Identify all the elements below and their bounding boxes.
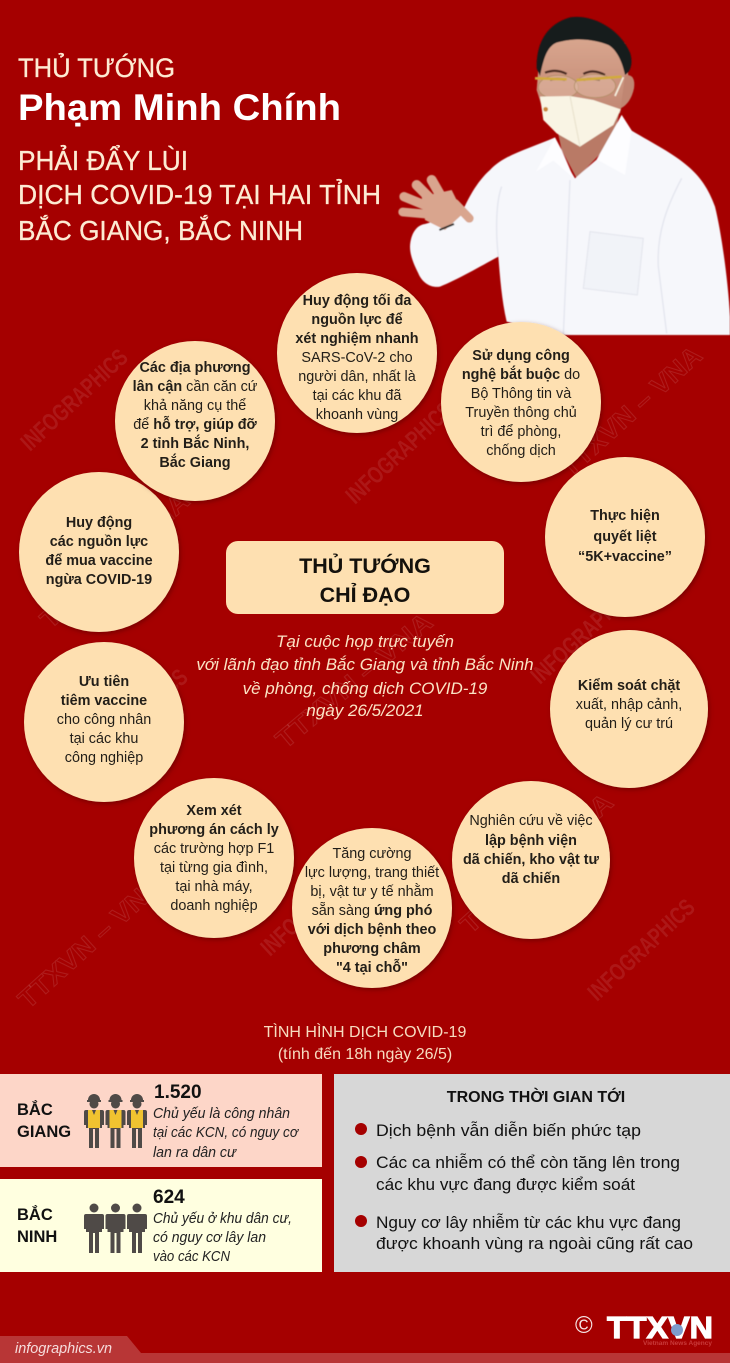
circle: mandatory technology: trì để phòng, [481,424,561,440]
watermarks: TTXVN – VNA [270,606,438,755]
panel: Bắc Giang: lan ra dân cư [153,1145,238,1161]
watermarks: INFOGRAPHICS [526,577,644,689]
watermarks: TTXVN – VNA [454,787,619,939]
watermarks: TTXVN – VNA [554,340,708,482]
situation heading: TÌNH HÌNH DỊCH COVID-19 [264,1022,466,1041]
circle: rapid testing: Huy động tối đa [303,293,412,309]
watermarks: INFOGRAPHICS [341,397,459,509]
situation heading [264,1022,466,1063]
shirt [410,115,730,335]
circle: mandatory technology: Sử dụng công [472,348,570,364]
bullet list: Dịch bệnh vẫn diễn biến phức tạp [376,1121,641,1140]
logo: TTXVN: TTXVN [607,1310,713,1345]
circle: border control: Kiểm soát chặt [578,678,680,694]
circle: vaccination priority: cho công nhân [57,712,151,728]
circle: four on-the-spot: phương châm [323,941,421,957]
circle: rapid testing: tại các khu đã [313,388,401,404]
circle: vaccination priority: tiêm vaccine [61,693,147,709]
circle: vaccine funding: để mua vaccine [45,553,153,569]
panel: Bắc Ninh: NINH [17,1228,57,1246]
watermarks: TTXVN – VNA [34,485,195,634]
logo: TTXVN: Vietnam News Agency [643,1341,713,1347]
circle: vaccine funding: Huy động [66,515,132,531]
bullet list: các khu vực đang được kiểm soát [376,1176,635,1194]
title block [18,51,381,246]
shirt collar [536,115,632,178]
title block: PHẢI ĐẨY LÙI [18,144,188,176]
circle: 5K plus vaccine [545,457,705,617]
panel: Bắc Ninh: vào các KCN [153,1249,230,1265]
meeting description: với lãnh đạo tỉnh Bắc Giang và tỉnh Bắc Ninh [196,655,534,674]
panel: Bắc Giang: 1.520 [154,1082,202,1103]
circle: mandatory technology: chống dịch [486,443,556,459]
circle: F1 isolation: các trường hợp F1 [154,841,274,857]
circle: field hospitals: dã chiến, kho vật tư [463,852,600,868]
bullet list: Nguy cơ lây nhiễm từ các khu vực đang [376,1213,681,1232]
panel: Bắc Giang: GIANG [17,1123,71,1141]
circle: four on-the-spot: lực lượng, trang thiết [305,865,439,881]
panel: outlook [334,1074,730,1272]
panel: Bắc Ninh: có nguy cơ lây lan [153,1230,266,1246]
central heading box [226,541,504,614]
meeting description: về phòng, chống dịch COVID-19 [243,679,488,698]
icon: three workers in vests [84,1094,147,1148]
panel: Bắc Ninh [0,1179,322,1272]
circle: neighbouring provinces: Bắc Giang [159,453,231,471]
circle: vaccine funding: ngừa COVID-19 [46,572,152,588]
panel: Bắc Giang: BẮC [17,1100,53,1119]
circle: F1 isolation: tại từng gia đình, [160,860,268,876]
circle: F1 isolation: Xem xét [186,803,242,819]
circle: mandatory technology: Truyền thông chủ [465,405,577,421]
circle: neighbouring provinces [115,341,275,501]
situation heading: (tính đến 18h ngày 26/5) [278,1046,452,1063]
circle: neighbouring provinces: để hỗ trợ, giúp đỡ [133,416,258,433]
watermarks: TTXVN – VNA [12,868,170,1014]
central heading box: CHỈ ĐẠO [320,582,410,607]
glasses [538,75,578,99]
watermarks [12,340,708,1014]
circle: vaccination priority [24,642,184,802]
icon: three residents [84,1204,147,1253]
circle: rapid testing [277,273,437,433]
meeting description [196,632,534,720]
circle: field hospitals [452,781,610,939]
circle: rapid testing: xét nghiệm nhanh [295,331,419,347]
bullet list: Các ca nhiễm có thể còn tăng lên trong [376,1153,680,1172]
panel: outlook: TRONG THỜI GIAN TỚI [447,1087,625,1106]
title block: BẮC GIANG, BẮC NINH [18,215,303,246]
circle: neighbouring provinces: 2 tỉnh Bắc Ninh, [141,434,249,452]
title block: Phạm Minh Chính [18,87,341,128]
circle: border control: quản lý cư trú [585,716,673,732]
panel: Bắc Giang: Chủ yếu là công nhân [153,1106,290,1122]
watermarks: INFOGRAPHICS [76,664,194,776]
circle: four on-the-spot: với dịch bệnh theo [308,922,436,938]
circle: vaccination priority: tại các khu [70,731,138,747]
face and ear [537,27,628,117]
panel: Bắc Ninh: Chủ yếu ở khu dân cư, [153,1211,292,1227]
circle: four on-the-spot [292,828,452,988]
bullet list [355,1121,693,1253]
circle: vaccination priority: công nghiệp [65,750,143,766]
panel: Bắc Giang: tại các KCN, có nguy cơ [153,1125,299,1141]
circle: field hospitals: dã chiến [502,871,560,887]
circle: mandatory technology [441,322,601,482]
circle: four on-the-spot: "4 tại chỗ" [336,959,408,976]
circle: vaccine funding: các nguồn lực [50,534,148,550]
circle: border control: xuất, nhập cảnh, [576,697,682,713]
circle: rapid testing: nguồn lực để [311,312,403,328]
circle: field hospitals: Nghiên cứu về việc [469,813,593,829]
circle: rapid testing: SARS-CoV-2 cho [301,350,413,366]
circle: F1 isolation: phương án cách ly [149,822,279,838]
circle: F1 isolation [134,778,294,938]
circle: F1 isolation: tại nhà máy, [175,879,253,895]
watermarks: INFOGRAPHICS [16,344,134,456]
circle: neighbouring provinces: khả năng cụ thể [144,398,246,414]
neck [557,110,620,178]
portrait of the Prime Minister [403,17,730,335]
hair [537,17,631,76]
circle: rapid testing: người dân, nhất là [298,369,416,385]
meeting description: ngày 26/5/2021 [306,701,424,720]
circle: F1 isolation: doanh nghiệp [170,898,258,914]
hand [403,180,469,218]
panel: Bắc Ninh: BẮC [17,1205,53,1224]
eyebrows and eyes [545,71,605,80]
circle: neighbouring provinces: Các địa phương [139,360,251,376]
circle: field hospitals: lập bệnh viện [485,833,577,849]
watermarks: INFOGRAPHICS [256,849,374,961]
circle: 5K plus vaccine: “5K+vaccine” [578,549,672,565]
title block: DỊCH COVID-19 TẠI HAI TỈNH [18,178,381,210]
mask [540,96,621,147]
circle: 5K plus vaccine: quyết liệt [593,529,657,545]
title block: THỦ TƯỚNG [18,51,175,83]
logo: TTXVN [575,1310,713,1347]
footer bar [0,1336,730,1363]
shirt details [497,178,682,335]
circle: border control [550,630,708,788]
meeting description: Tại cuộc họp trực tuyến [276,632,454,651]
bullet list: được khoanh vùng ra ngoài cũng rất cao [376,1235,693,1253]
circle: four on-the-spot: sẵn sàng ứng phó [312,902,433,919]
circle: four on-the-spot: Tăng cường [332,846,412,862]
circle: four on-the-spot: bị, vật tư y tế nhằm [310,883,434,900]
logo: TTXVN: © [575,1312,593,1339]
circle: rapid testing: khoanh vùng [316,407,398,423]
circle: mandatory technology: nghệ bắt buộc do [462,365,580,383]
footer bar: infographics.vn [15,1340,112,1357]
panel: Bắc Ninh: 624 [153,1187,185,1208]
circle: 5K plus vaccine: Thực hiện [590,508,660,524]
circle: vaccine funding [19,472,179,632]
circle: vaccination priority: Ưu tiên [79,674,129,690]
panel: Bắc Giang [0,1074,322,1167]
circle: mandatory technology: Bộ Thông tin và [471,386,571,402]
central heading box: THỦ TƯỚNG [299,553,431,578]
circle: neighbouring provinces: lân cận cần căn cứ [133,379,258,395]
